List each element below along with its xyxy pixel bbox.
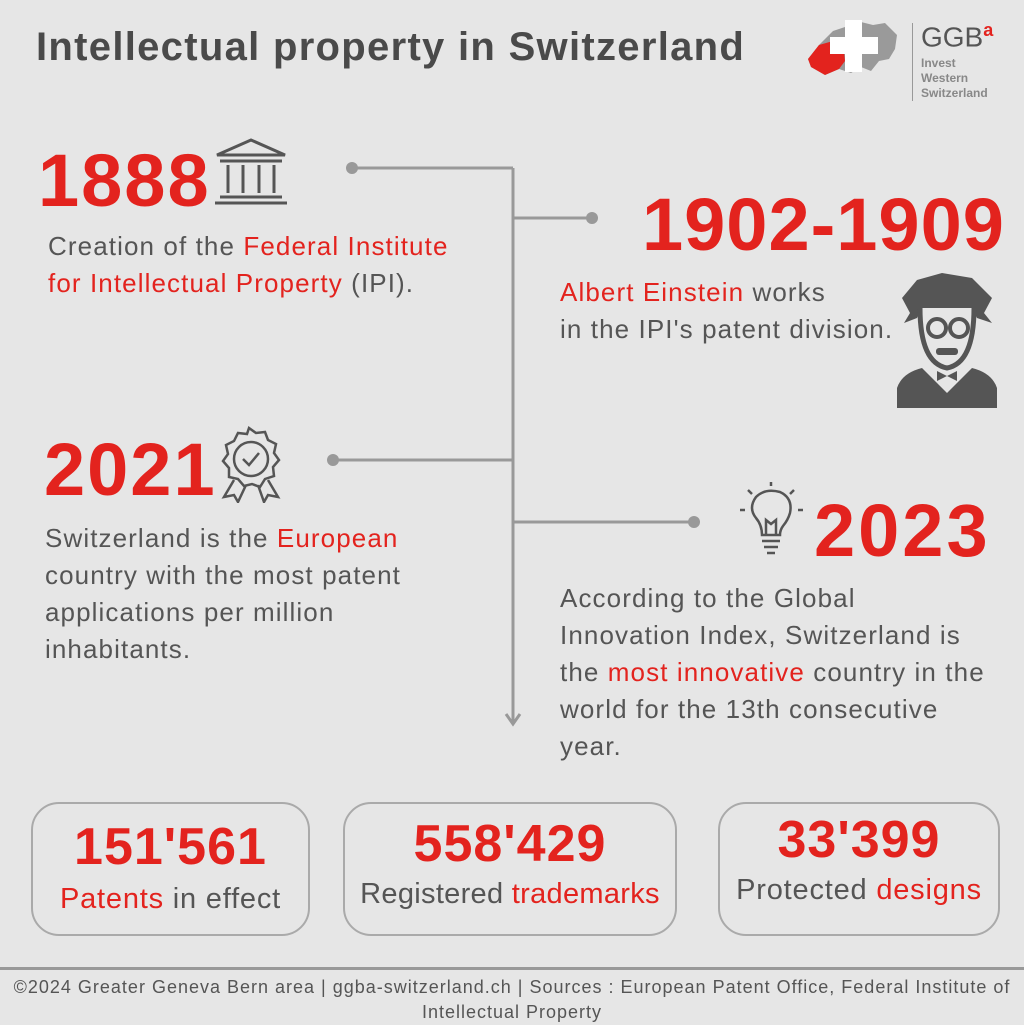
text 2023: Innovation Index, Switzerland is <box>560 620 961 650</box>
stat: designs: 33'399 <box>778 811 940 869</box>
stat: trademarks: 558'429 <box>414 815 606 873</box>
icon: badge <box>222 426 280 503</box>
text einstein: in the IPI's patent division. <box>560 314 893 344</box>
stat: trademarks: Registered trademarks <box>360 878 660 910</box>
text 1888 <box>48 231 449 298</box>
icon: einstein <box>897 273 997 408</box>
title: Intellectual property in Switzerland <box>36 25 745 69</box>
text einstein <box>560 277 893 344</box>
footer: ©2024 Greater Geneva Bern area | ggba-switzerland.ch | Sources : European Patent Office, Federal Institute of <box>14 977 1010 997</box>
text 1888: Creation of the Federal Institute <box>48 231 449 261</box>
2023: 2023 <box>814 489 991 572</box>
footer: Intellectual Property <box>422 1002 602 1022</box>
text 2023: According to the Global <box>560 583 856 613</box>
text 2021: Switzerland is the European <box>45 523 398 553</box>
logo: Switzerland <box>921 86 988 100</box>
stat: designs: Protected designs <box>736 874 982 906</box>
logo <box>808 20 994 101</box>
text 2021: country with the most patent <box>45 560 401 590</box>
logo: Invest <box>921 56 956 70</box>
text 2023: the most innovative country in the <box>560 657 985 687</box>
text einstein: Albert Einstein works <box>560 277 826 307</box>
text 2021: applications per million <box>45 597 334 627</box>
text 2023: world for the 13th consecutive <box>560 694 938 724</box>
1902-1909: 1902-1909 <box>642 183 1005 266</box>
stat: patents <box>31 802 310 936</box>
stat: patents: 151'561 <box>74 818 267 876</box>
text 1888: for Intellectual Property (IPI). <box>48 268 414 298</box>
icon: building <box>215 138 287 204</box>
text 2023: year. <box>560 731 622 761</box>
stat: patents: Patents in effect <box>60 883 281 915</box>
2021: 2021 <box>44 428 217 511</box>
text 2023 <box>560 583 985 761</box>
stat: designs <box>718 802 1000 936</box>
1888: 1888 <box>38 139 211 222</box>
text 2021 <box>45 523 401 664</box>
logo: GGBa <box>921 20 993 52</box>
logo: Western <box>921 71 968 85</box>
icon: bulb <box>740 482 803 554</box>
text 2021: inhabitants. <box>45 634 191 664</box>
footer <box>14 977 1010 1022</box>
stat: trademarks <box>343 802 677 936</box>
